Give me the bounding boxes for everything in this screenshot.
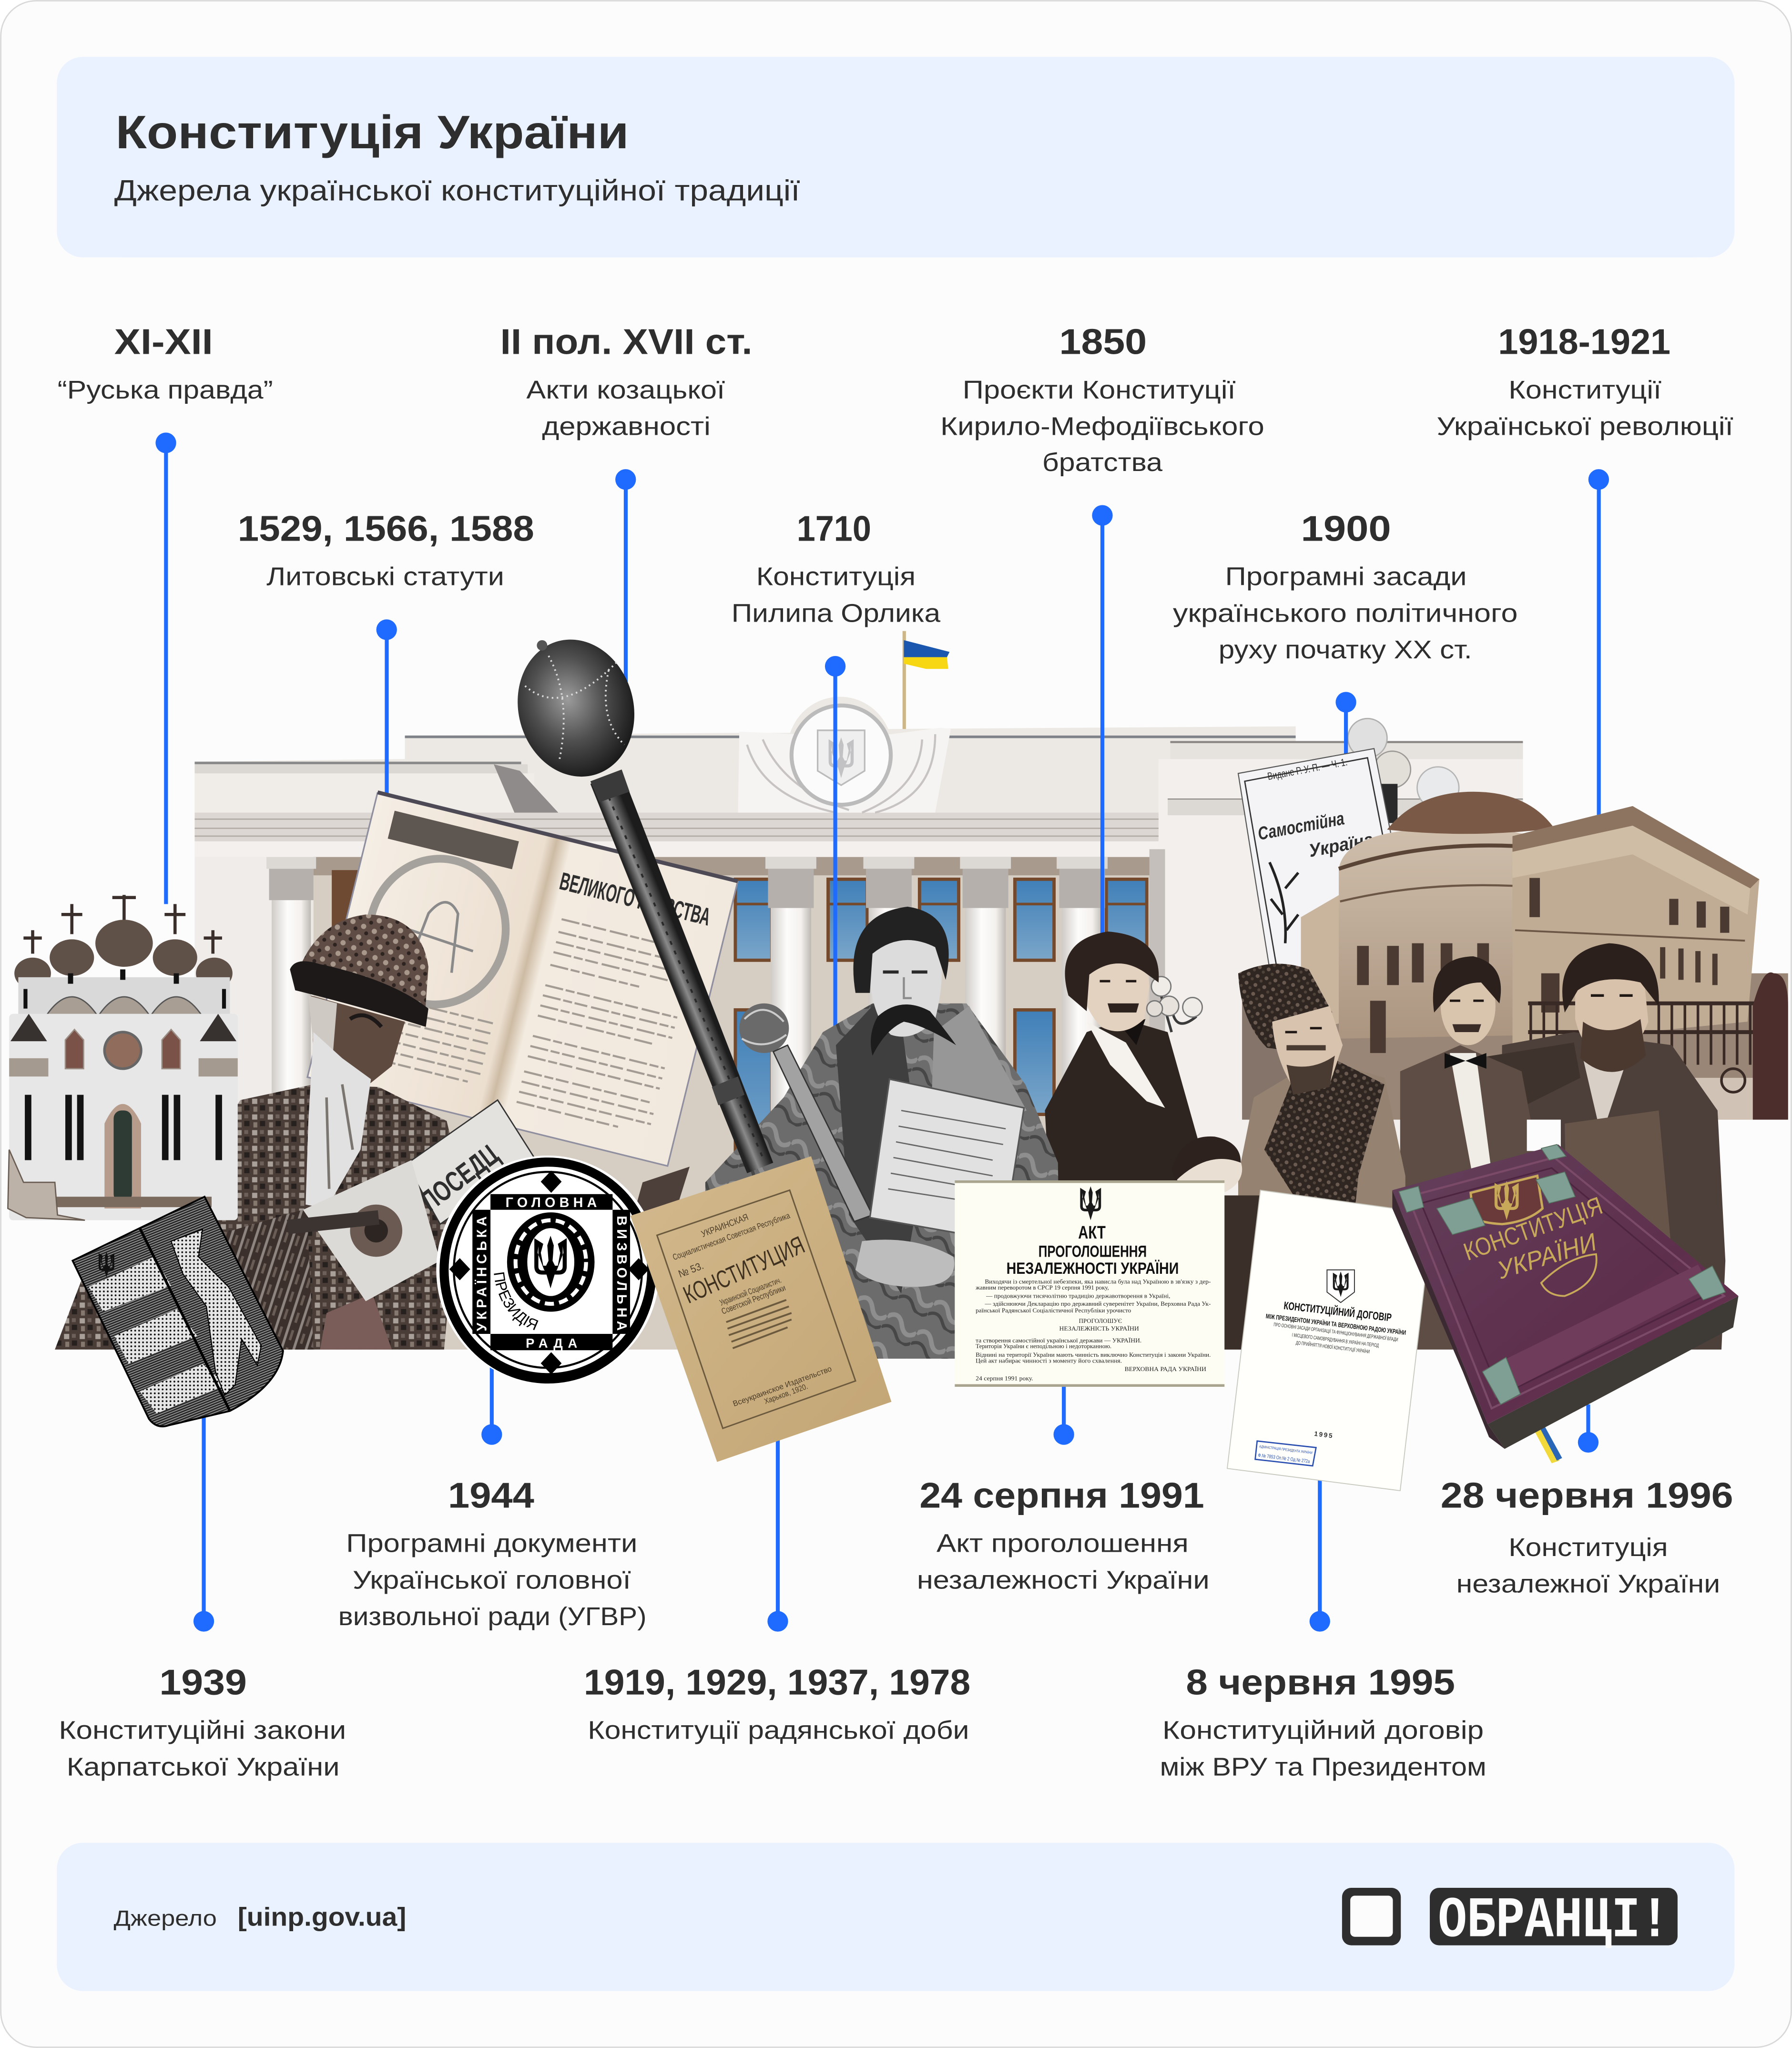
left wing xyxy=(1301,889,1358,1032)
label: 1944: Української головної xyxy=(353,1566,631,1594)
brochure: Soviet constitution: Советской Республики xyxy=(720,1283,787,1316)
book: Constitution of Ukraine: УКРАЇНИ xyxy=(1494,1228,1600,1285)
pin 1991 xyxy=(1054,1378,1074,1445)
pamphlet: Samostiyna Ukraina: Видане Р. У. П. — Ч. 1. xyxy=(1266,756,1348,782)
brochure: Soviet constitution: КОНСТИТУЦИЯ xyxy=(680,1231,809,1309)
document: Act of Declaration of Independence: Територія України є неподільною і недоторканною. xyxy=(976,1343,1111,1350)
page block xyxy=(1487,1296,1739,1449)
label: II half XVII: II пол. XVII ст. xyxy=(500,322,753,362)
heraldic wreath xyxy=(354,844,521,1019)
pin Cossack acts xyxy=(615,469,636,708)
label: 1850: братства xyxy=(1042,449,1162,477)
label: 1939: Карпатської України xyxy=(67,1753,340,1781)
label: 1918-1921: Української революції xyxy=(1437,413,1733,441)
diamonds xyxy=(449,1170,649,1374)
pin 1939 xyxy=(193,1404,214,1632)
source label: Джерело xyxy=(113,1905,217,1930)
cover xyxy=(1392,1145,1739,1424)
emblem xyxy=(1471,1176,1543,1224)
pin Lithuanian statutes xyxy=(377,619,397,806)
fence and trees xyxy=(1528,1004,1757,1032)
pin 1918 xyxy=(1588,469,1609,819)
label: 8 June 1995: 8 червня 1995 xyxy=(1186,1662,1455,1702)
small mace xyxy=(739,1004,873,1221)
portrait: Yaroslav the Wise xyxy=(55,914,690,1350)
figure: middle man xyxy=(1400,956,1541,1350)
seal of the Supreme Liberation Council: УКРАЇНСЬКА xyxy=(474,1216,490,1331)
brochure: Soviet constitution xyxy=(631,1156,891,1462)
label: 1944: визвольної ради (УГВР) xyxy=(338,1603,647,1631)
label: 8 June 1995: Конституційний договір xyxy=(1162,1717,1484,1745)
face xyxy=(868,929,942,1037)
hand xyxy=(855,1239,954,1287)
label: 1710: 1710 xyxy=(797,509,871,549)
flag xyxy=(903,631,949,729)
crosses xyxy=(23,895,222,954)
seal of the Supreme Liberation Council xyxy=(436,1156,660,1384)
sepia building scene xyxy=(1242,792,1788,1120)
document: Act of Declaration of Independence: — продовжуючи тисячолітню традицію державотворення в Україні, xyxy=(986,1293,1171,1300)
label: 28 June 1996: 28 червня 1996 xyxy=(1441,1475,1733,1516)
document: Constitutional Treaty: І МІСЦЕВОГО САМОВРЯДУВАННЯ В УКРАЇНІ НА ПЕРІОД xyxy=(1292,1332,1379,1349)
document: Act of Declaration of Independence: НЕЗАЛЕЖНІСТЬ УКРАЇНИ xyxy=(1059,1325,1139,1332)
collage background: parliament building xyxy=(194,697,1523,1350)
held document xyxy=(870,1079,1024,1241)
brochure: Soviet constitution: Украинской Социалистич. xyxy=(718,1275,783,1308)
emblem and drapes xyxy=(738,727,951,813)
header ornament xyxy=(388,811,519,869)
timeline connector lines and dots, top xyxy=(155,432,1609,1032)
church body xyxy=(9,1014,238,1220)
white gap between figures xyxy=(1527,1120,1561,1151)
label: 1850: Кирило-Мефодіївського xyxy=(940,413,1264,441)
green corners xyxy=(1399,1145,1725,1404)
document: Act of Declaration of Independence: 24 серпня 1991 року. xyxy=(976,1375,1033,1382)
label: 28 June 1996: незалежної України xyxy=(1456,1570,1720,1598)
label: XI-XII: XI-XII xyxy=(114,322,213,362)
label: 24 August 1991: незалежності України xyxy=(917,1566,1210,1594)
portrait: Pylyp Orlyk xyxy=(705,907,1060,1359)
pamphlet: Samostiyna Ukraina: Самостійна xyxy=(1256,808,1346,844)
label: 1850: Проєкти Конституції xyxy=(963,376,1236,404)
document: Constitutional Treaty: Ф.№ 7853 Оп.№ 2 Од.№ 272а xyxy=(1258,1453,1310,1464)
label: Soviet constitutions: Конституції радянської доби xyxy=(588,1717,969,1745)
pin 1995 xyxy=(1310,1476,1330,1632)
subtitle: Джерела української конституційної традиції xyxy=(114,174,800,207)
seal of the Supreme Liberation Council: ПРЕЗИДІЯ xyxy=(490,1270,541,1334)
pamphlet: Samostiyna Ukraina xyxy=(1238,748,1417,993)
brochure: Soviet constitution: Всеукраинское Издательство xyxy=(732,1364,833,1408)
central wreath xyxy=(507,1212,594,1311)
label: 28 June 1996: Конституція xyxy=(1508,1534,1668,1562)
book cover with title xyxy=(406,1100,534,1224)
document: Act of Declaration of Independence: раїнської Радянської Соціалістичної Республіки урочисто xyxy=(976,1307,1131,1314)
document: Constitutional Treaty: ДО ПРИЙНЯТТЯ НОВОЇ КОНСТИТУЦІЇ УКРАЇНИ xyxy=(1295,1340,1370,1355)
document: Act of Declaration of Independence: Виходячи із смертельної небезпеки, яка нависла була над Україною в зв'язку з дер- xyxy=(985,1279,1211,1285)
label: 1710: Пилипа Орлика xyxy=(732,599,940,627)
label: II half XVII: Акти козацької xyxy=(526,376,725,404)
pin 1944 xyxy=(481,1359,502,1445)
document: Act of Declaration of Independence: ПРОГОЛОШУЄ xyxy=(1079,1318,1122,1324)
document: Constitutional Treaty: КОНСТИТУЦІЙНИЙ ДОГОВІР xyxy=(1283,1299,1392,1324)
brochure: Soviet constitution: Харьков, 1920. xyxy=(763,1382,809,1406)
tray xyxy=(9,1197,212,1207)
label: 24 August 1991: Акт проголошення xyxy=(937,1530,1189,1558)
document: Act of Declaration of Independence: ПРОГОЛОШЕННЯ xyxy=(1039,1242,1147,1260)
building windows xyxy=(1357,878,1729,1053)
label: 1939: 1939 xyxy=(159,1662,247,1702)
label: 1900: 1900 xyxy=(1301,509,1391,549)
page heading: ВЕЛИКОГО КНЯЗСТВА xyxy=(557,868,713,931)
pin 1900 xyxy=(1335,692,1356,768)
beard xyxy=(305,1032,371,1208)
label: II half XVII: державності xyxy=(542,413,711,441)
page text lines xyxy=(365,881,693,1134)
coat of arms: Carpatho-Ukraine xyxy=(72,1197,283,1426)
label: 28 June 1996 xyxy=(1441,1475,1733,1598)
label: 1900: руху початку XX ст. xyxy=(1219,636,1472,664)
document: Act of Declaration of Independence xyxy=(955,1180,1224,1387)
right wing wall xyxy=(1158,812,1523,841)
label: XI-XII: “Руська правда” xyxy=(58,376,273,404)
lamp globes xyxy=(1147,718,1459,1032)
pin 1919 xyxy=(767,1431,788,1632)
label: 1939: Конституційні закони xyxy=(59,1717,346,1745)
source link: [uinp.gov.ua] xyxy=(238,1902,406,1931)
label: 8 June 1995 xyxy=(1160,1662,1487,1781)
brochure: Soviet constitution: № 53. xyxy=(677,1260,705,1280)
label: 1944: Програмні документи xyxy=(346,1530,637,1558)
church illustration xyxy=(8,895,238,1220)
gold cover title: КОНСТИТУЦІЯ xyxy=(1460,1192,1606,1266)
drums and arches xyxy=(18,977,230,1016)
label: Soviet constitutions: 1919, 1929, 1937, 1978 xyxy=(584,1662,970,1702)
portrait: Yaroslav the Wise: ПОСЕДЦ xyxy=(414,1138,504,1218)
label: 1918-1921 xyxy=(1437,322,1733,441)
label: 1900 xyxy=(1173,509,1517,664)
windows and door xyxy=(25,1095,222,1160)
title: Конституція України xyxy=(116,106,629,158)
pin Orlyk xyxy=(825,656,845,1032)
spine xyxy=(1392,1190,1505,1449)
document: Act of Declaration of Independence: Цей акт набирає чинності з моменту його схвалення. xyxy=(976,1357,1122,1364)
label: 1900: українського політичного xyxy=(1173,599,1517,627)
document: Act of Declaration of Independence: Віднині на території України мають чинність виключно Конституція і закони України. xyxy=(976,1352,1211,1358)
footer band xyxy=(57,1843,1734,1991)
document: Act of Declaration of Independence: жавним переворотом в СРСР 19 серпня 1991 року, xyxy=(975,1284,1109,1291)
label: XI-XII xyxy=(58,322,273,404)
label: 1939 xyxy=(59,1662,346,1781)
medallion and small icons xyxy=(104,1032,141,1069)
figure: standing man with bow tie xyxy=(1045,932,1242,1350)
document: Constitutional Treaty: МІЖ ПРЕЗИДЕНТОМ УКРАЇНИ ТА ВЕРХОВНОЮ РАДОЮ УКРАЇНИ xyxy=(1265,1312,1406,1336)
label: 1918-1921: 1918-1921 xyxy=(1498,322,1670,362)
right block xyxy=(1513,806,1759,1045)
logo mark xyxy=(1342,1888,1401,1946)
document: Constitutional Treaty: АДМІНІСТРАЦІЯ ПРЕЗИДЕНТА УКРАЇНИ xyxy=(1259,1444,1313,1455)
document: Constitutional Treaty: 1995 xyxy=(1314,1430,1333,1440)
bear xyxy=(171,1229,261,1395)
rotunda xyxy=(1339,828,1554,1039)
label: Soviet constitutions xyxy=(584,1662,970,1745)
document: Act of Declaration of Independence: ВЕРХОВНА РАДА УКРАЇНИ xyxy=(1125,1366,1206,1372)
ribbon xyxy=(1522,1406,1559,1463)
header band xyxy=(57,57,1734,257)
document: Constitutional Treaty xyxy=(1227,1190,1433,1491)
document: Constitutional Treaty: ПРО ОСНОВНІ ЗАСАДИ ОРГАНІЗАЦІЇ ТА ФУНКЦІОНУВАННЯ ДЕРЖАВНОЇ ВЛАДИ xyxy=(1273,1322,1398,1343)
pamphlet: Samostiyna Ukraina: Україна xyxy=(1307,829,1375,861)
document: Act of Declaration of Independence: НЕЗАЛЕЖНОСТІ УКРАЇНИ xyxy=(1007,1260,1179,1278)
people: Cyril and Methodius brotherhood xyxy=(1045,932,1725,1350)
label: 1710 xyxy=(732,509,940,627)
document: Act of Declaration of Independence: та створення самостійної української держави — УКРАЇНИ. xyxy=(976,1337,1141,1344)
document: Act of Declaration of Independence: — здійснюючи Декларацію про державний суверенітет України, Верховна Рада Ук- xyxy=(984,1300,1211,1307)
mace xyxy=(503,626,773,1173)
book: Constitution of Ukraine xyxy=(1392,1145,1739,1463)
label: 1710: Конституція xyxy=(756,563,916,591)
open book: Lithuanian statute xyxy=(307,790,738,1166)
seal words: ГОЛОВНА xyxy=(506,1195,597,1210)
timeline connector lines and dots, bottom xyxy=(193,1359,1599,1632)
label: 1944 xyxy=(338,1475,647,1631)
label: 1529, 1566, 1588: 1529, 1566, 1588 xyxy=(238,509,534,549)
columns xyxy=(266,857,1108,1112)
label: 1850 xyxy=(940,322,1264,477)
logo wordmark: ОБРАНЦІ! xyxy=(1438,1889,1669,1954)
label: 1529, 1566, 1588 xyxy=(238,509,534,591)
dome xyxy=(1387,792,1554,834)
label: II half XVII xyxy=(500,322,753,441)
label: 1918-1921: Конституції xyxy=(1508,376,1661,404)
brochure: Soviet constitution: Социалистическая Советская Республика xyxy=(672,1210,791,1262)
windows xyxy=(735,879,1147,1167)
document: Act of Declaration of Independence: АКТ xyxy=(1078,1222,1106,1243)
pin 1850 xyxy=(1092,505,1113,946)
figure: child head xyxy=(1174,1143,1242,1196)
figure: Shevchenko in fur hat xyxy=(1238,964,1405,1350)
domes xyxy=(14,920,233,989)
seal of the Supreme Liberation Council: ВИЗВОЛЬНА xyxy=(614,1216,629,1331)
pin 1996 xyxy=(1578,1404,1599,1453)
face xyxy=(311,995,405,1097)
light bands xyxy=(89,1257,171,1311)
label: 1850: 1850 xyxy=(1059,322,1147,362)
brochure: Soviet constitution: УКРАИНСКАЯ xyxy=(700,1212,750,1239)
pin XI-XII xyxy=(155,432,176,904)
label: 24 August 1991: 24 серпня 1991 xyxy=(919,1475,1204,1516)
label: 24 August 1991 xyxy=(917,1475,1210,1594)
seal of the Supreme Liberation Council: РАДА xyxy=(526,1336,578,1351)
label: 1529, 1566, 1588: Литовські статути xyxy=(266,563,504,591)
hat xyxy=(295,914,428,1022)
figure: right bearded man xyxy=(1476,943,1725,1350)
square frame bars xyxy=(490,1194,612,1210)
label: 1944: 1944 xyxy=(448,1475,534,1516)
label: 1900: Програмні засади xyxy=(1225,563,1467,591)
label: 8 June 1995: між ВРУ та Президентом xyxy=(1160,1753,1487,1781)
